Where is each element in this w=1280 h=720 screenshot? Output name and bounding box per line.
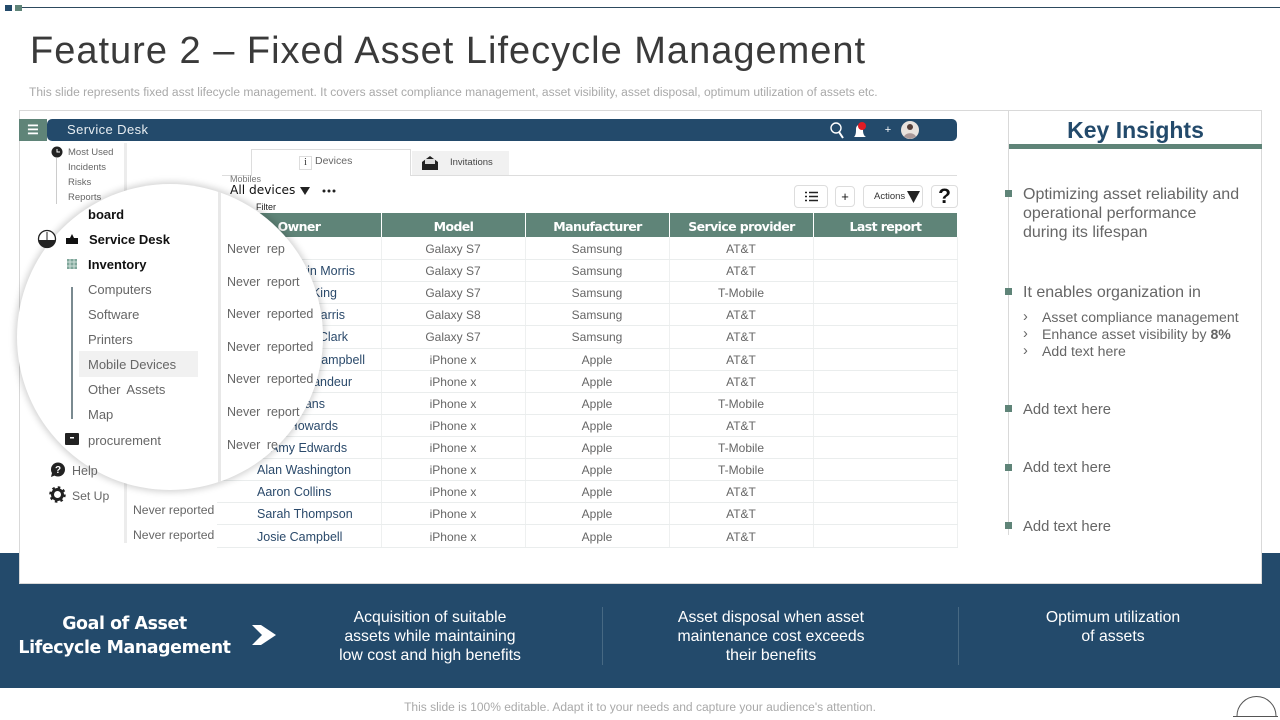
table: devices: iPhone x <box>430 419 476 433</box>
icon: service desk <box>66 234 78 244</box>
magnifier lens: Other Assets <box>88 382 165 397</box>
selected row <box>79 351 198 377</box>
table: devices: Kevin Morris <box>286 264 355 278</box>
table: devices: Galaxy S7 <box>425 330 481 344</box>
icon: clock <box>52 146 62 158</box>
goal 2: Asset disposal when asset <box>678 609 864 626</box>
magnifier lens: Inventory <box>88 257 147 272</box>
goal 3: Optimum utilization <box>1046 609 1180 626</box>
table header <box>260 213 957 237</box>
insight 1: operational performance <box>1023 205 1196 222</box>
tab: invitations <box>412 151 509 175</box>
tree line <box>71 287 73 419</box>
sidebar: most used: Reports <box>68 192 101 203</box>
magnifier lens: Never re <box>227 438 278 452</box>
table: devices: Alice Clark <box>288 330 348 344</box>
toolbar buttons: ? <box>938 185 951 208</box>
goal 1: assets while maintaining <box>344 628 516 645</box>
magnifier lens: Computers <box>88 282 152 297</box>
table: devices: Samsung <box>572 330 622 344</box>
device filter heading: Filter <box>256 202 276 212</box>
insight 2: Asset compliance management <box>1042 309 1239 325</box>
table: devices: Jack King <box>283 286 337 300</box>
table: devices: AT&T <box>726 375 756 389</box>
goal 2 <box>677 609 865 664</box>
table: devices: iPhone x <box>430 530 476 544</box>
device filter heading: All devices <box>230 183 295 197</box>
icon: procurement <box>65 433 79 445</box>
footer note: This slide is 100% editable. Adapt it to your needs and capture your audience's attention. <box>404 700 876 714</box>
table: devices: iPhone x <box>430 353 476 367</box>
tab: devices: Devices <box>315 155 352 167</box>
sidebar: help: Help <box>72 464 98 478</box>
panel: key insights <box>1008 111 1262 535</box>
table: devices: T-Mobile <box>718 463 764 477</box>
insight 1: during its lifespan <box>1023 224 1148 241</box>
table: devices: Aaron Collins <box>257 485 331 499</box>
goal heading <box>18 614 231 658</box>
table: devices: Apple <box>582 397 612 411</box>
table: devices: AT&T <box>726 507 756 521</box>
table: devices: T-Mobile <box>718 286 764 300</box>
bar title: Service Desk <box>67 122 148 137</box>
goal heading: Lifecycle Management <box>18 638 231 658</box>
magnifier lens: Mobile Devices <box>88 357 176 372</box>
table: devices: Samsung <box>572 286 622 300</box>
insight 1: Optimizing asset reliability and <box>1023 186 1239 203</box>
insight 2: It enables organization in <box>1023 284 1201 301</box>
device filter heading: Mobiles <box>230 174 261 184</box>
table: devices: Apple <box>582 463 612 477</box>
table: devices: Apple <box>582 353 612 367</box>
table: devices: Apple <box>582 507 612 521</box>
insight 4: Add text here <box>1023 460 1111 476</box>
insight 2: Enhance asset visibility by 8% <box>1042 326 1231 342</box>
table: devices: Galaxy S7 <box>425 286 481 300</box>
tabs <box>222 149 957 176</box>
goal 1: Acquisition of suitable <box>354 609 506 626</box>
tab: devices: i <box>304 157 307 168</box>
table: devices: Apple <box>582 419 612 433</box>
heading: Key Insights <box>1067 117 1204 143</box>
top rule <box>5 5 1280 11</box>
table: devices: iPhone x <box>430 441 476 455</box>
never reported labels outside lens: Never reported <box>133 528 214 542</box>
table: devices: Rita Grandeur <box>273 375 352 389</box>
subtitle: This slide represents fixed asst lifecycle management. It covers asset compliance management, asset visibility, asset disposal, optimum utilization of assets etc. <box>29 85 878 99</box>
table: devices: Apple <box>582 530 612 544</box>
table: devices: AT&T <box>726 242 756 256</box>
magnifier lens: board <box>88 207 124 222</box>
table: devices: Amy Edwards <box>270 441 347 455</box>
tab: invitations: Invitations <box>450 157 493 168</box>
table: devices: Samsung <box>572 242 622 256</box>
sidebar: most used: Most Used <box>68 147 113 158</box>
icon: chevron arrow <box>252 625 276 645</box>
insight 2: › <box>1023 326 1028 342</box>
toolbar buttons <box>794 185 958 208</box>
sidebar: set up <box>49 486 109 503</box>
table: devices <box>217 213 958 548</box>
lens divider <box>218 190 221 490</box>
sidebar divider <box>124 143 127 543</box>
magnifier lens: Never report <box>227 275 299 289</box>
table: devices: Alan Washington <box>257 463 351 477</box>
tab: devices <box>251 149 411 176</box>
sidebar: help <box>51 462 98 478</box>
magnifier lens: Never reported <box>227 372 313 386</box>
insight 5: Add text here <box>1023 519 1111 535</box>
never reported labels outside lens: Never reported <box>133 503 214 517</box>
insight 2: › <box>1023 309 1028 325</box>
magnifier lens: Never reported <box>227 307 313 321</box>
icon: search <box>830 122 844 138</box>
magnifier lens: Never rep <box>227 242 285 256</box>
table: devices: Apple <box>582 485 612 499</box>
panel: service desk app bar <box>19 119 957 141</box>
table: devices: Joan Campbell <box>282 353 365 367</box>
insight 2 <box>1005 284 1239 359</box>
goal 3: of assets <box>1081 628 1145 645</box>
icon: inventory <box>67 259 77 269</box>
magnifier lens <box>17 184 323 490</box>
goal 1 <box>339 609 521 664</box>
goal 1: low cost and high benefits <box>339 647 521 664</box>
toolbar buttons: Actions <box>874 191 905 202</box>
table: devices: AT&T <box>726 530 756 544</box>
sidebar: most used <box>52 146 113 204</box>
table: devices: AT&T <box>726 485 756 499</box>
goal 2: maintenance cost exceeds <box>677 628 865 645</box>
magnifier lens: Never report <box>227 405 299 419</box>
goal 3 <box>1046 609 1180 645</box>
table: devices: AT&T <box>726 419 756 433</box>
table header: Model <box>434 219 473 234</box>
table: devices: Samsung <box>572 264 622 278</box>
goal heading: Goal of Asset <box>62 614 187 634</box>
magnifier lens: Printers <box>88 332 133 347</box>
table: devices: iPhone x <box>430 507 476 521</box>
plus: + <box>885 124 891 136</box>
table: devices: iPhone x <box>430 485 476 499</box>
table header: Owner <box>278 219 320 234</box>
table: devices: AT&T <box>726 308 756 322</box>
insight 2: › <box>1023 343 1028 359</box>
goal 2: their benefits <box>726 647 816 664</box>
table: devices: T-Mobile <box>718 441 764 455</box>
table: devices: Mia Howards <box>265 419 338 433</box>
title: Feature 2 – Fixed Asset Lifecycle Management <box>30 30 866 72</box>
sidebar: set up: Set Up <box>72 489 109 503</box>
table: devices: iPhone x <box>430 397 476 411</box>
sidebar: most used: Incidents <box>68 162 106 173</box>
table: devices: iPhone x <box>430 375 476 389</box>
table header: Manufacturer <box>553 219 642 234</box>
table header: Last report <box>850 219 921 234</box>
icon: bell <box>854 122 866 137</box>
table: devices: AT&T <box>726 353 756 367</box>
sidebar: help: ? <box>55 465 61 476</box>
menu button <box>19 119 47 141</box>
table: devices: Apple <box>582 441 612 455</box>
table: devices: AT&T <box>726 264 756 278</box>
table: devices: AT&T <box>726 330 756 344</box>
table: devices: Galaxy S7 <box>425 264 481 278</box>
table: devices: Sarah Thompson <box>257 507 353 521</box>
magnifier lens: Never reported <box>227 340 313 354</box>
icon: avatar <box>901 121 919 139</box>
menu button: ☰ <box>27 122 39 137</box>
table header: Service provider <box>688 219 795 234</box>
insight 1 <box>1005 186 1239 241</box>
table: devices: Tom Evans <box>263 397 325 411</box>
toolbar buttons: + <box>841 189 849 204</box>
insight 3: Add text here <box>1023 402 1111 418</box>
icon: dashboard gauge <box>38 230 56 248</box>
magnifier lens: Service Desk <box>89 232 170 247</box>
bar <box>47 119 957 141</box>
insight 2: Add text here <box>1042 343 1126 359</box>
table: devices: Apple <box>582 375 612 389</box>
table: devices: Jane Harris <box>281 308 345 322</box>
panel: main white card <box>19 110 1262 584</box>
table: devices: Galaxy S7 <box>425 242 481 256</box>
table: devices: Samsung <box>572 308 622 322</box>
navy band <box>0 553 1280 688</box>
sidebar: most used: Risks <box>68 177 91 188</box>
magnifier lens: Map <box>88 407 113 422</box>
magnifier lens: Software <box>88 307 139 322</box>
icon: corner dome <box>1233 696 1278 717</box>
table: devices: Galaxy S8 <box>425 308 481 322</box>
never reported labels outside lens <box>133 502 216 543</box>
table: devices: T-Mobile <box>718 397 764 411</box>
table: devices: iPhone x <box>430 463 476 477</box>
table: devices: Josie Campbell <box>257 530 342 544</box>
device filter heading <box>230 174 336 212</box>
magnifier lens: procurement <box>88 433 161 448</box>
